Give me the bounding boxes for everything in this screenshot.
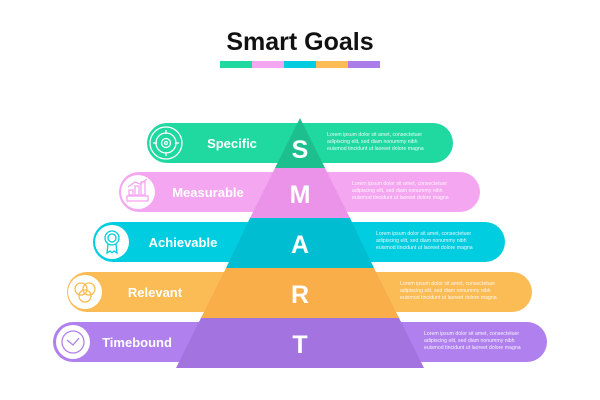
bar: Measurable: Measurable bbox=[172, 185, 244, 200]
pyramid: T bbox=[292, 331, 308, 359]
bar: Achievable: Lorem ipsum dolor sit amet, consectetuer bbox=[376, 231, 471, 237]
icon: award bbox=[95, 225, 129, 259]
icon: chart bbox=[121, 175, 155, 209]
bar: Relevant: euismod tincidunt ut laoreet dolore magna bbox=[400, 295, 497, 301]
bar: Specific: adipiscing elit, sed diam nonummy nibh bbox=[327, 139, 418, 145]
icon: target bbox=[150, 127, 182, 159]
pyramid: M bbox=[290, 181, 310, 209]
bar: Timebound bbox=[53, 322, 547, 362]
bar: Achievable: Achievable bbox=[149, 235, 217, 250]
bar: Measurable: euismod tincidunt ut laoreet dolore magna bbox=[352, 195, 449, 201]
pyramid: S bbox=[292, 136, 308, 164]
bar: Specific: Lorem ipsum dolor sit amet, consectetuer bbox=[327, 132, 422, 138]
icon: venn bbox=[68, 275, 102, 309]
bar: Measurable: Lorem ipsum dolor sit amet, consectetuer bbox=[352, 181, 447, 187]
pyramid bbox=[176, 118, 424, 368]
pyramid: R bbox=[291, 281, 309, 309]
title: Smart Goals bbox=[226, 28, 374, 56]
bar: Relevant: Relevant bbox=[128, 285, 183, 300]
icon: clock bbox=[56, 325, 90, 359]
color legend bar bbox=[220, 61, 380, 68]
bar: Specific: Specific bbox=[207, 136, 257, 151]
bar: Specific bbox=[147, 123, 453, 163]
bar: Achievable bbox=[93, 222, 505, 262]
bar: Measurable: adipiscing elit, sed diam nonummy nibh bbox=[352, 188, 443, 194]
bar: Timebound: Timebound bbox=[102, 335, 172, 350]
pyramid: A bbox=[291, 231, 309, 259]
bar: Achievable: adipiscing elit, sed diam nonummy nibh bbox=[376, 238, 467, 244]
bar: Timebound: euismod tincidunt ut laoreet dolore magna bbox=[424, 345, 521, 351]
bar: Specific: euismod tincidunt ut laoreet dolore magna bbox=[327, 146, 424, 152]
bar: Relevant: adipiscing elit, sed diam nonummy nibh bbox=[400, 288, 491, 294]
bar: Relevant bbox=[67, 272, 532, 312]
bar: Achievable: euismod tincidunt ut laoreet dolore magna bbox=[376, 245, 473, 251]
bar: Measurable bbox=[119, 172, 480, 212]
bar: Timebound: Lorem ipsum dolor sit amet, consectetuer bbox=[424, 331, 519, 337]
bar: Relevant: Lorem ipsum dolor sit amet, consectetuer bbox=[400, 281, 495, 287]
bar: Timebound: adipiscing elit, sed diam nonummy nibh bbox=[424, 338, 515, 344]
